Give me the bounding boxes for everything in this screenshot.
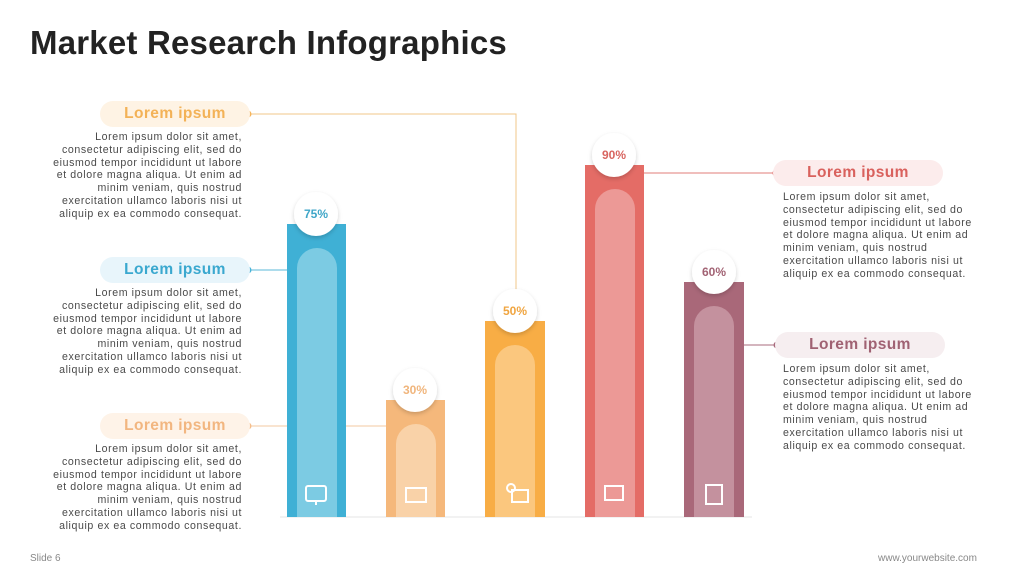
- callout: right 2: Lorem ipsum dolor sit amet,: [783, 363, 930, 375]
- callout: right 2: [775, 332, 972, 452]
- callout: left 3: exercitation ullamco laboris nisi ut: [62, 507, 242, 519]
- bar: 50%: 50%: [503, 304, 527, 318]
- callout: right 1: consectetur adipiscing elit, sed do: [783, 204, 963, 216]
- callout: right 2: et dolore magna aliqua. Ut enim ad: [783, 401, 968, 413]
- callout: right 2: eiusmod tempor incididunt ut labore: [783, 389, 972, 401]
- bar: 90%: 90%: [602, 148, 626, 162]
- callout: right 1: aliquip ex ea commodo consequat.: [783, 268, 966, 280]
- bar: 30%: 30%: [403, 383, 427, 397]
- bar: 60%: 60%: [702, 265, 726, 279]
- callout: right 2: aliquip ex ea commodo consequat.: [783, 440, 966, 452]
- callout: left 2: exercitation ullamco laboris nisi ut: [62, 351, 242, 363]
- bar: 50%: [485, 289, 545, 517]
- bar: 60%: [684, 250, 744, 517]
- callout: left 1: et dolore magna aliqua. Ut enim ad: [57, 169, 242, 181]
- callout: right 1: et dolore magna aliqua. Ut enim ad: [783, 229, 968, 241]
- callout: left 1: exercitation ullamco laboris nisi ut: [62, 195, 242, 207]
- callout: right 1: Lorem ipsum dolor sit amet,: [783, 191, 930, 203]
- callout: left 2: [53, 257, 250, 376]
- callout: left 1: Lorem ipsum: [124, 105, 226, 122]
- callout: left 2: consectetur adipiscing elit, sed do: [62, 300, 242, 312]
- callout: left 2: Lorem ipsum dolor sit amet,: [95, 287, 242, 299]
- callout: right 2: consectetur adipiscing elit, sed do: [783, 376, 963, 388]
- footer: website: www.yourwebsite.com: [878, 553, 977, 564]
- callout: left 2: et dolore magna aliqua. Ut enim ad: [57, 325, 242, 337]
- callout: left 2: Lorem ipsum: [124, 261, 226, 278]
- dots: [244, 110, 780, 430]
- callout: left 1: Lorem ipsum dolor sit amet,: [95, 131, 242, 143]
- callout: left 2: aliquip ex ea commodo consequat.: [59, 364, 242, 376]
- callout: left 1: eiusmod tempor incididunt ut labore: [53, 157, 242, 169]
- callout: right 2: exercitation ullamco laboris nisi ut: [783, 427, 963, 439]
- callout: right 1: Lorem ipsum: [807, 164, 909, 181]
- callout: right 1: minim veniam, quis nostrud: [783, 242, 928, 254]
- callout: left 3: et dolore magna aliqua. Ut enim ad: [57, 481, 242, 493]
- title: Market Research Infographics: [30, 24, 507, 61]
- footer: slide number: Slide 6: [30, 553, 61, 564]
- callout: left 1: minim veniam, quis nostrud: [97, 182, 242, 194]
- callout: left 2: minim veniam, quis nostrud: [97, 338, 242, 350]
- callout: left 3: consectetur adipiscing elit, sed do: [62, 456, 242, 468]
- callout: left 3: eiusmod tempor incididunt ut labore: [53, 469, 242, 481]
- callout: left 1: aliquip ex ea commodo consequat.: [59, 208, 242, 220]
- callout: right 1: [773, 160, 972, 280]
- callout: left 3: aliquip ex ea commodo consequat.: [59, 520, 242, 532]
- callout: left 1: consectetur adipiscing elit, sed do: [62, 144, 242, 156]
- callout: left 3: Lorem ipsum: [124, 417, 226, 434]
- callout: left 1: [53, 101, 250, 220]
- bar: 90%: [585, 133, 644, 517]
- bar: 75%: [287, 192, 346, 517]
- callout: right 2: minim veniam, quis nostrud: [783, 414, 928, 426]
- callout: left 3: Lorem ipsum dolor sit amet,: [95, 443, 242, 455]
- bar: 75%: 75%: [304, 207, 328, 221]
- connector lines: [248, 114, 777, 426]
- callout: left 3: minim veniam, quis nostrud: [97, 494, 242, 506]
- callout: right 2: Lorem ipsum: [809, 336, 911, 353]
- callout: right 1: exercitation ullamco laboris nisi ut: [783, 255, 963, 267]
- callout: left 2: eiusmod tempor incididunt ut labore: [53, 313, 242, 325]
- callout: right 1: eiusmod tempor incididunt ut labore: [783, 217, 972, 229]
- bar: 30%: [386, 368, 445, 517]
- callout: left 3: [53, 413, 250, 532]
